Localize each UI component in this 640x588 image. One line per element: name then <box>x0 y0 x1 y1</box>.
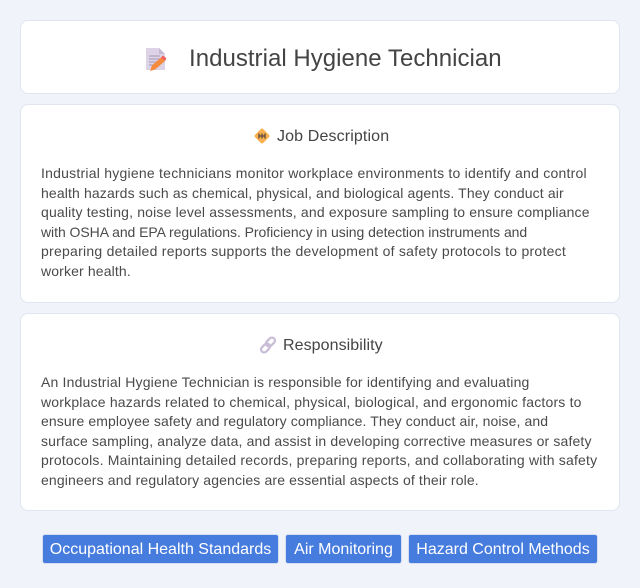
job description text: quality testing, noise level assessments, and exposure sampling to ensure compliance <box>41 204 590 220</box>
icon: diamond sign <box>254 128 270 144</box>
tag: air monitoring <box>285 534 402 564</box>
responsibility text <box>41 374 598 488</box>
icon: document with pencil <box>146 48 166 71</box>
job description text: worker health. <box>41 262 131 278</box>
tag: occupational health standards <box>42 534 279 564</box>
tag: hazard control methods: Hazard Control Methods <box>416 541 590 558</box>
tag: occupational health standards: Occupational Health Standards <box>50 541 271 558</box>
responsibility text: surface sampling, analyze data, and assist in developing corrective measures or safety <box>41 432 592 448</box>
job description text: with OSHA and EPA regulations. Proficiency in using detection instruments and <box>41 224 527 240</box>
responsibility text: protocols. Maintaining detailed records, preparing reports, and collaborating with safety <box>41 452 597 468</box>
panel: title card <box>20 20 620 94</box>
panel: job description <box>20 104 620 303</box>
responsibility text: engineers and regulatory agencies are essential aspects of their role. <box>41 472 479 488</box>
responsibility text: ensure employee safety and regulatory compliance. They conduct air, noise, and <box>41 413 548 429</box>
responsibility text: workplace hazards related to chemical, physical, biological, and ergonomic factors to <box>41 394 582 410</box>
tag: hazard control methods <box>408 534 598 564</box>
tag: air monitoring: Air Monitoring <box>294 541 393 558</box>
title: Industrial Hygiene Technician <box>189 45 502 72</box>
icon: chain link <box>260 336 276 354</box>
heading: responsibility: Responsibility <box>283 337 383 354</box>
job description text: health hazards such as chemical, physical, and biological agents. They conduct air <box>41 184 564 200</box>
job description text: preparing detailed reports supports the development of safety protocols to protect <box>41 243 566 259</box>
responsibility text: An Industrial Hygiene Technician is responsible for identifying and evaluating <box>41 374 530 390</box>
job description text: Industrial hygiene technicians monitor workplace environments to identify and control <box>41 165 587 181</box>
heading: job description: Job Description <box>277 128 389 145</box>
job description text <box>41 165 590 278</box>
panel: responsibility <box>20 313 620 511</box>
